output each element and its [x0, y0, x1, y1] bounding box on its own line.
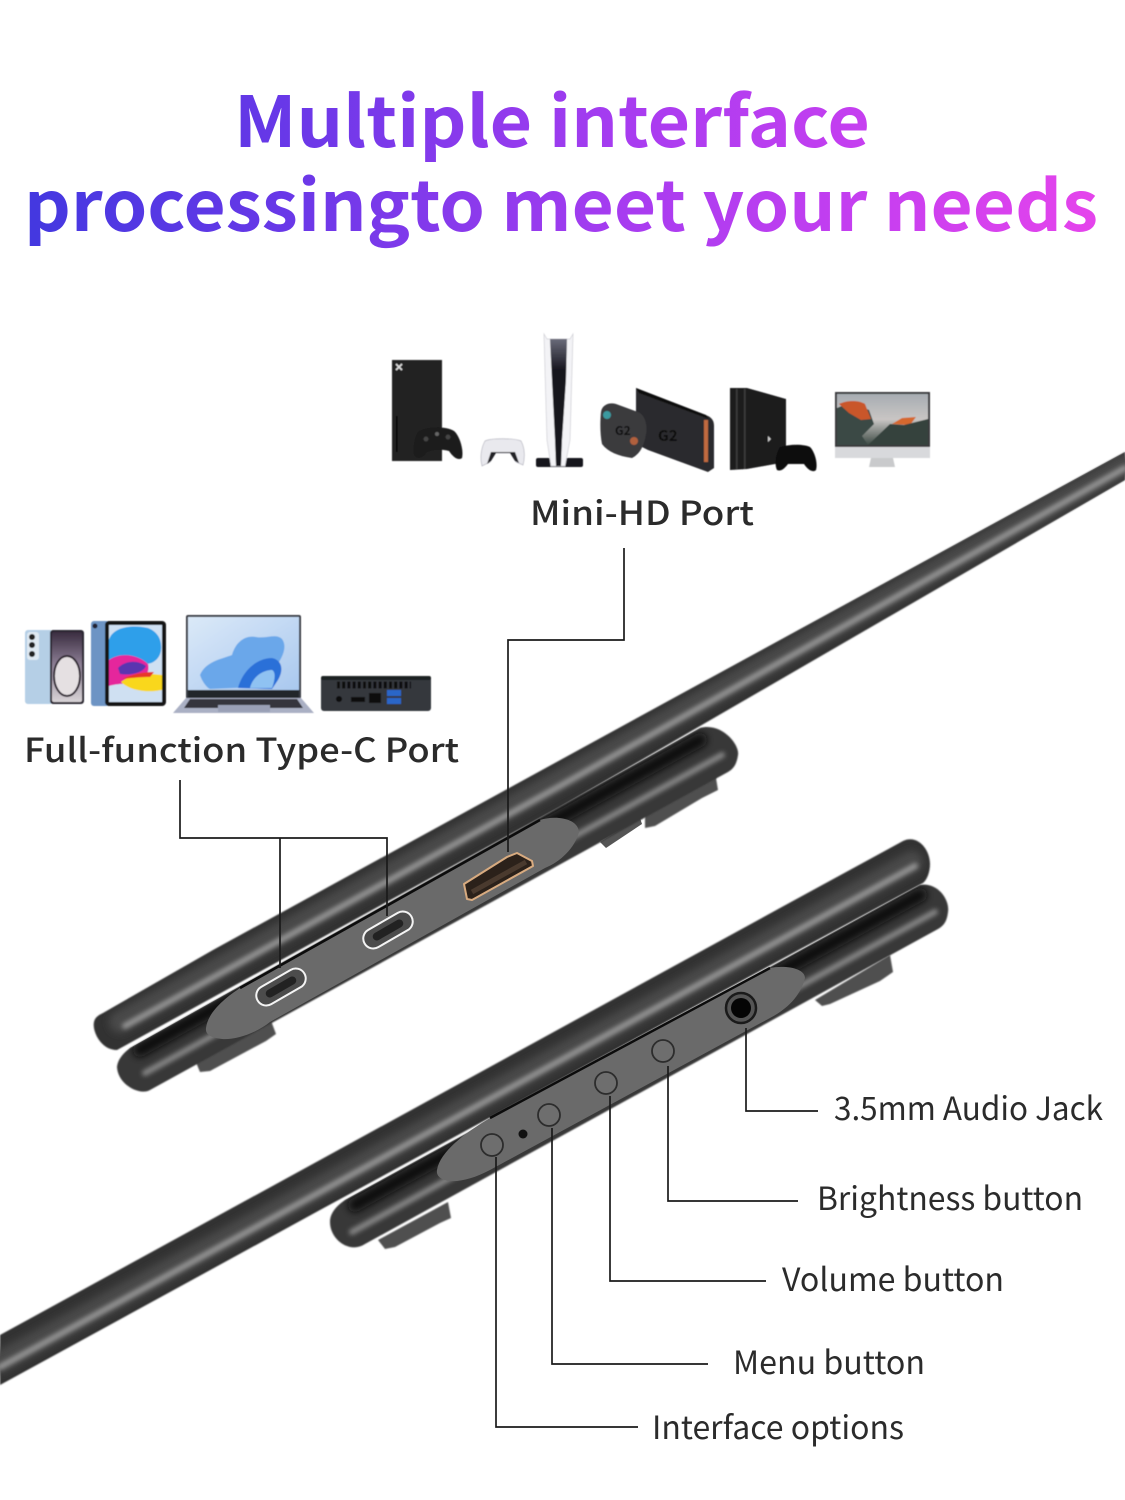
button: brightness: [652, 1040, 674, 1062]
indicator light: [518, 1130, 528, 1138]
icon: tablet: [91, 621, 166, 706]
icon: PS5 console: [536, 334, 583, 467]
monitor edge: lower device with buttons: [0, 839, 948, 1385]
title: [24, 67, 1098, 252]
port: Mini-HD: [464, 853, 533, 900]
icon: PS5 controller: [481, 439, 524, 466]
rear stand: upper device: [117, 727, 738, 1092]
label: Menu button: Menu button: [733, 1338, 925, 1384]
icon group: game consoles and desktop: [392, 334, 930, 472]
port: Type-C right: [360, 908, 416, 952]
monitor edge: upper device with video ports: [94, 452, 1125, 1092]
title: Multiple interface: [234, 67, 870, 168]
button: volume: [595, 1072, 617, 1094]
screen bar: lower device: [0, 839, 930, 1385]
title: processingto meet your needs: [24, 151, 1098, 252]
icon: Xbox console: [392, 360, 463, 461]
icon: handheld with dock: G2: [658, 425, 678, 446]
callout lines: [180, 548, 818, 1427]
port: 3.5mm audio jack: [726, 993, 756, 1023]
button: menu: [538, 1104, 560, 1126]
icon group: Type-C devices: [25, 615, 431, 713]
label: Volume button: Volume button: [782, 1255, 1004, 1301]
icon: laptop: [173, 615, 314, 713]
label: Full-function Type-C Port: Full-function Type-C Port: [24, 724, 459, 772]
icon: handheld with dock: G2: [615, 422, 631, 439]
rear stand: lower device: [330, 885, 948, 1249]
icon: smartphone: [25, 630, 84, 704]
label: Interface options: Interface options: [652, 1403, 904, 1449]
label: 3.5mm Audio Jack: 3.5mm Audio Jack: [834, 1084, 1103, 1130]
port: Type-C left: [253, 965, 309, 1009]
icon: iMac desktop: [835, 392, 930, 467]
icon: handheld with dock: [600, 388, 714, 472]
button: interface options: [481, 1134, 503, 1156]
icon: mini PC: [321, 676, 431, 711]
port plate: upper device: [206, 818, 579, 1039]
label: Mini-HD Port: Mini-HD Port: [530, 487, 754, 535]
icon: PS4 console and controller: [730, 388, 817, 471]
label: Brightness button: Brightness button: [817, 1174, 1083, 1220]
button plate: lower device: [437, 967, 805, 1181]
screen bar: upper device: [94, 452, 1125, 1050]
